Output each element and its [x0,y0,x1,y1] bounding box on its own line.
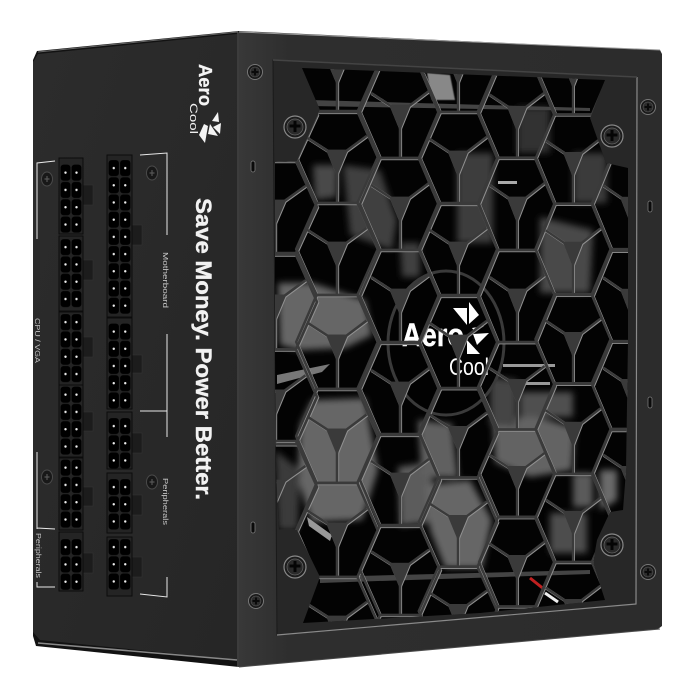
fan logo [402,302,489,381]
modular connectors: left column [59,158,93,591]
panel: left side of the case [33,31,239,667]
mounting slots [251,161,652,533]
front screws [248,64,656,608]
connector labels: Peripherals [34,533,41,579]
fan hub [388,271,504,415]
connector labels [33,252,168,579]
slogan: Save Money. Power Better. [191,198,216,500]
side logo: Cool [187,103,199,134]
modular connectors: right column [107,155,142,596]
side logo: Aero [195,64,215,106]
panel: front plate [239,31,662,667]
label brackets [37,153,167,597]
fan blades [275,107,617,568]
connector labels: Peripherals [161,478,168,526]
connector labels: Motherboard [161,252,168,308]
fan logo: Aero [402,317,464,353]
heatsink and internals seen through the grille [277,73,590,602]
fan grille opening [275,68,628,623]
side logo [187,64,221,143]
fan logo: Cool [449,354,489,381]
side screws [42,166,158,489]
connector labels: CPU / VGA [33,318,40,363]
honeycomb grille [275,69,628,622]
